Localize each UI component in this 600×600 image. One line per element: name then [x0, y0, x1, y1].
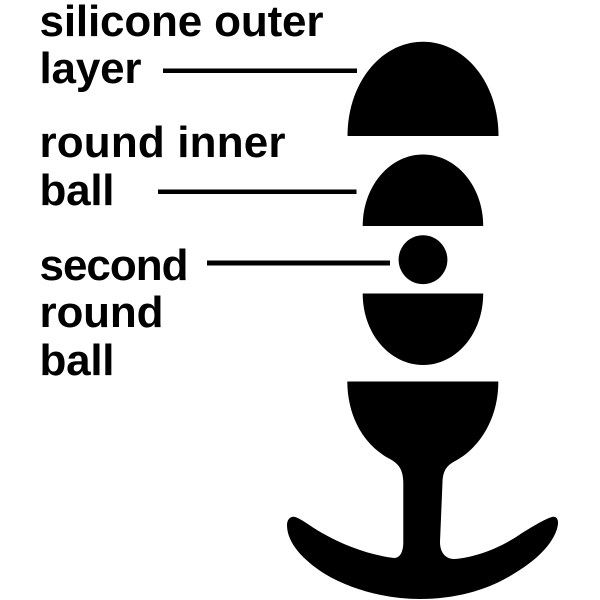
label: round inner ball: ball	[40, 166, 114, 215]
label: round inner ball: round inner	[40, 118, 286, 167]
inner ball top half	[363, 154, 483, 226]
label: second round ball	[40, 241, 188, 385]
outer layer top half	[348, 42, 498, 136]
leader line: second round ball	[207, 260, 390, 266]
label: second round ball: second	[40, 241, 188, 290]
label: silicone outer layer: layer	[40, 44, 142, 93]
inner ball bottom half	[363, 294, 483, 365]
leader line: silicone outer layer	[163, 68, 357, 73]
label: second round ball: ball	[40, 336, 114, 385]
leader line: round inner ball	[158, 190, 356, 194]
label: round inner ball	[40, 118, 286, 215]
label: second round ball: round	[40, 288, 164, 337]
label: silicone outer layer	[40, 0, 324, 93]
outer layer bottom half with anchor base	[287, 382, 558, 599]
second round ball	[399, 235, 447, 284]
